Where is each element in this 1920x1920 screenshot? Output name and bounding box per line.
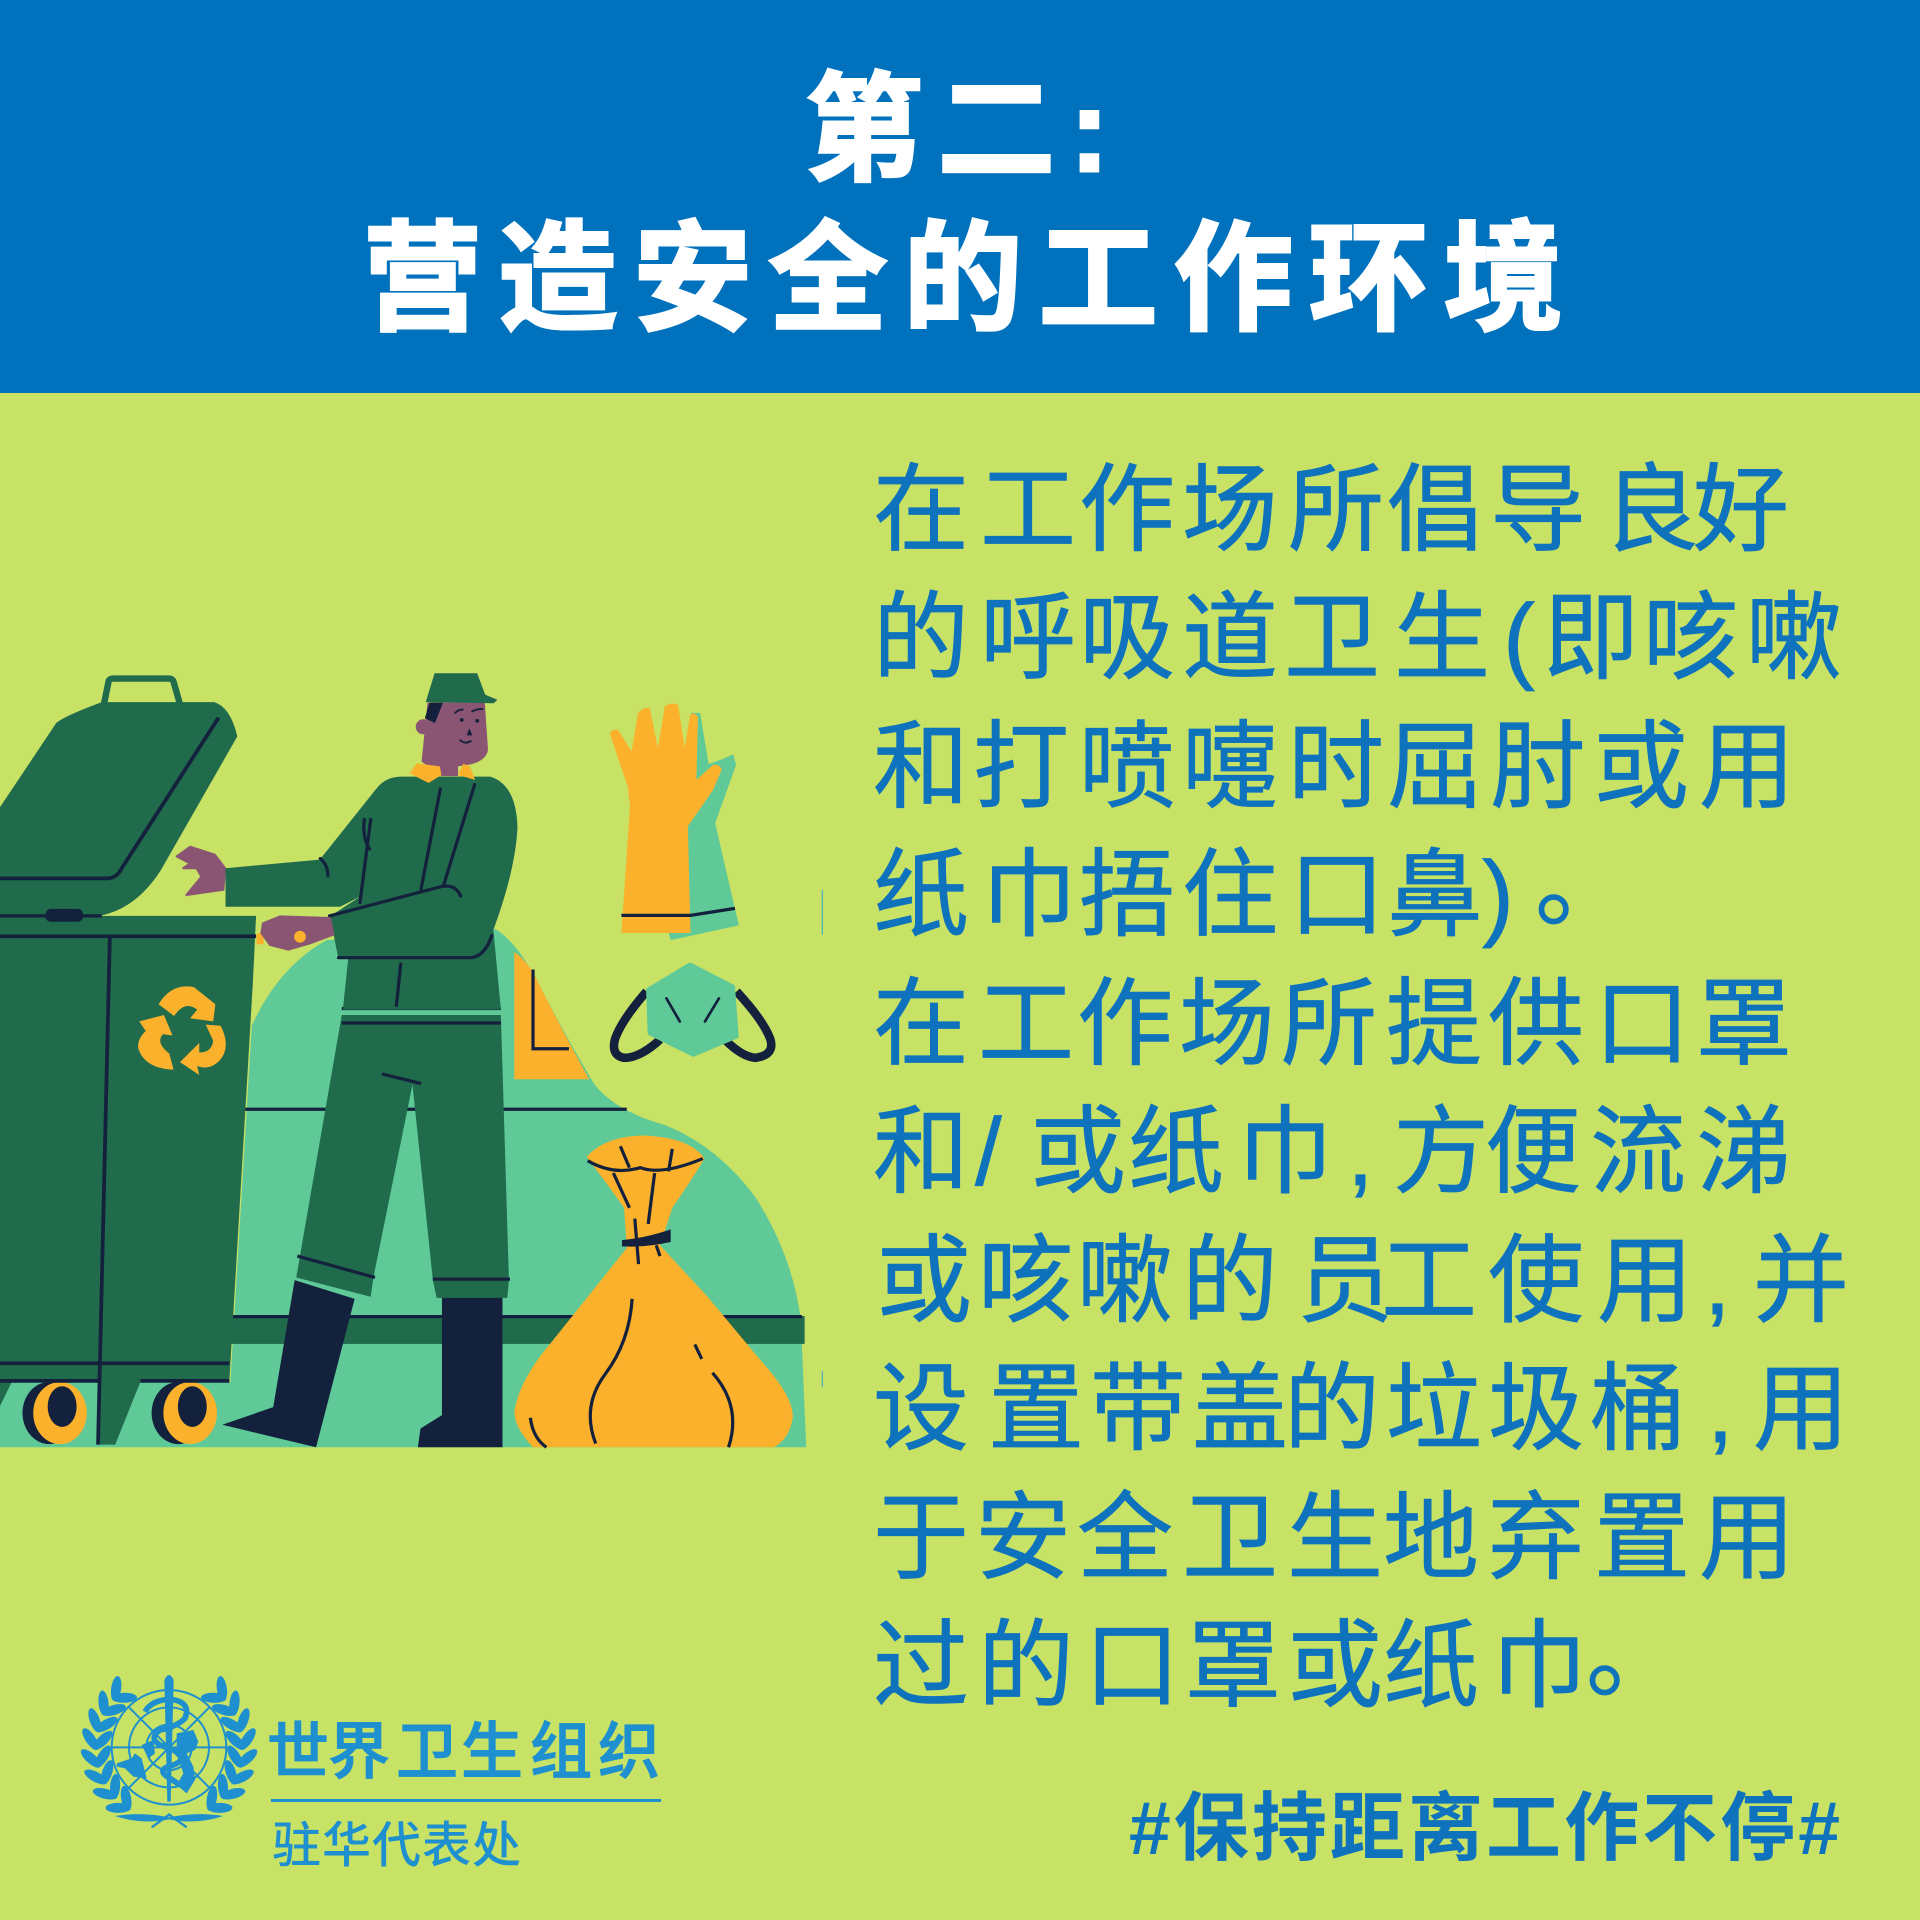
background blob [0,929,806,1447]
WHO logo [78,1675,661,1873]
rear hand [177,847,225,895]
body line 10: 过的口罩或纸巾。 [873,1603,1682,1720]
hashtag: #保持距离工作不停# [1129,1786,1840,1870]
office name: 驻华代表处 [272,1819,521,1873]
body line 9: 于安全卫生地弃置用 [873,1485,1795,1592]
worker head [410,674,497,783]
title line 1: 第二: [805,65,1109,197]
worker jacket [226,777,517,1010]
organisation name: 世界卫生组织 [267,1718,660,1787]
body line 6: 和/或纸巾,方便流涕 [873,1099,1792,1206]
wreath leaves [78,1675,260,1813]
body line 2: 的呼吸道卫生(即咳嗽 [873,585,1842,692]
bin lid [0,679,237,922]
WHO emblem [78,1675,260,1827]
logo divider [271,1799,661,1802]
icon: tied rubbish bag [514,1136,793,1447]
worker trousers [296,1009,510,1298]
front hand [257,916,333,950]
body line 5: 在工作场所提供口罩 [873,971,1792,1078]
illustration: sanitation worker with waste bin [0,674,822,1447]
waste bin [0,916,256,1445]
icon: rubber gloves [610,704,738,939]
body line 8: 设置带盖的垃圾桶,用 [873,1356,1849,1463]
wheels [22,1382,217,1444]
body line 4: 纸巾捂住口鼻)。 [873,832,1631,949]
body text block [873,457,1849,1720]
icon: face mask [614,965,771,1058]
header banner with title [0,0,1920,393]
icon: recycle symbol [138,986,226,1075]
worker boots [222,1280,502,1447]
title line 2: 营造安全的工作环境 [363,213,1563,346]
body line 3: 和打喷嚏时屈肘或用 [873,714,1795,821]
body line 7: 或咳嗽的员工使用,并 [876,1228,1849,1335]
artifact ticks [821,890,823,1387]
body line 1: 在工作场所倡导良好 [873,457,1789,564]
